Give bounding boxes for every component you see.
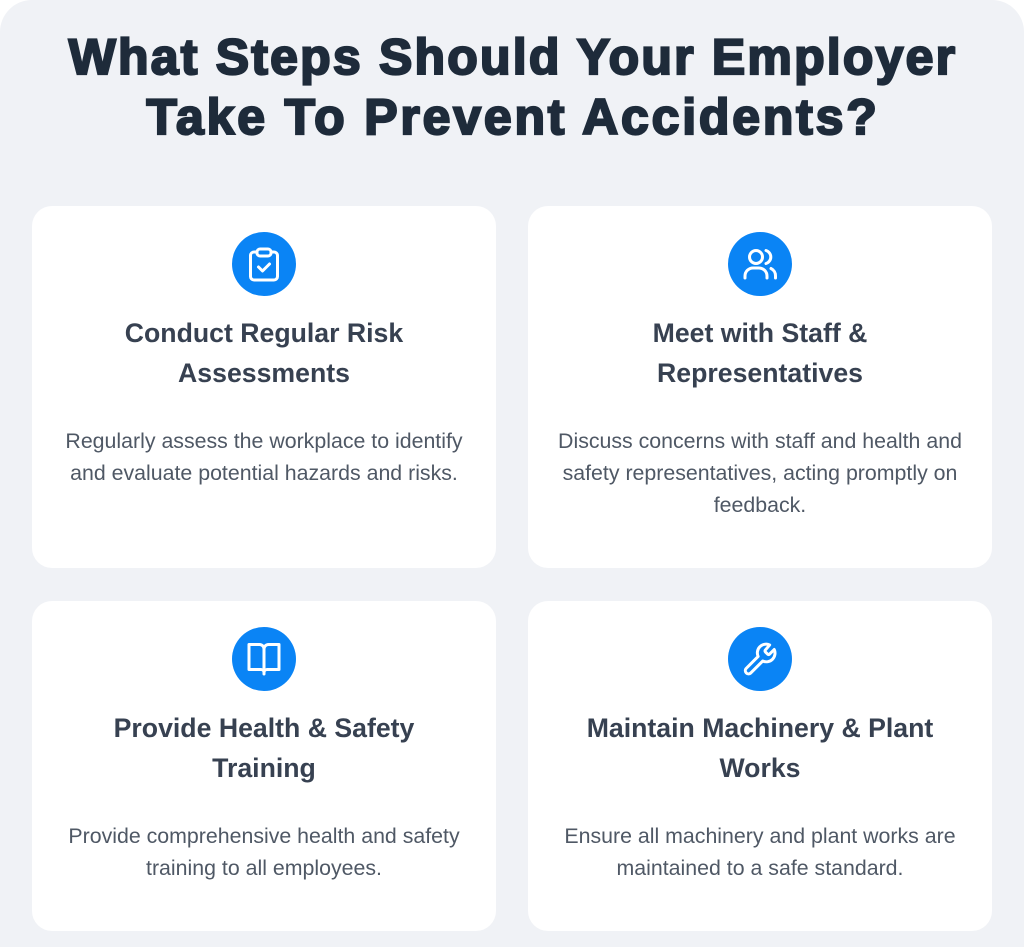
icon: users	[728, 232, 792, 296]
description: maintained to a safe standard.	[617, 856, 903, 880]
heading: Conduct Regular Risk	[125, 318, 403, 348]
heading	[114, 713, 414, 783]
description: training to all employees.	[146, 856, 382, 880]
description	[564, 824, 956, 880]
description: and evaluate potential hazards and risks.	[70, 461, 458, 485]
icon: open book	[232, 627, 296, 691]
description: Regularly assess the workplace to identify	[65, 429, 463, 453]
panel: training	[32, 601, 496, 931]
title	[67, 29, 957, 145]
heading: Meet with Staff &	[653, 318, 867, 348]
description: Ensure all machinery and plant works are	[564, 824, 956, 848]
panel: staff and representatives	[528, 206, 992, 568]
heading: Assessments	[178, 358, 350, 388]
title: Take To Prevent Accidents?	[146, 89, 880, 145]
description: Discuss concerns with staff and health and	[558, 429, 962, 453]
heading: Works	[720, 753, 800, 783]
description: safety representatives, acting promptly on	[563, 461, 957, 485]
icon: clipboard check	[232, 232, 296, 296]
heading: Maintain Machinery & Plant	[587, 713, 933, 743]
description: feedback.	[714, 493, 806, 517]
description	[558, 429, 962, 517]
heading: Representatives	[657, 358, 863, 388]
title: What Steps Should Your Employer	[69, 29, 957, 85]
heading	[125, 318, 404, 388]
description: Provide comprehensive health and safety	[68, 824, 460, 848]
heading: Training	[212, 753, 316, 783]
panel: risk assessments	[32, 206, 496, 568]
heading: Provide Health & Safety	[114, 713, 414, 743]
heading	[587, 713, 933, 783]
icon: wrench	[728, 627, 792, 691]
heading	[653, 318, 867, 388]
panel: machinery	[528, 601, 992, 931]
description	[65, 429, 463, 485]
description	[68, 824, 460, 880]
